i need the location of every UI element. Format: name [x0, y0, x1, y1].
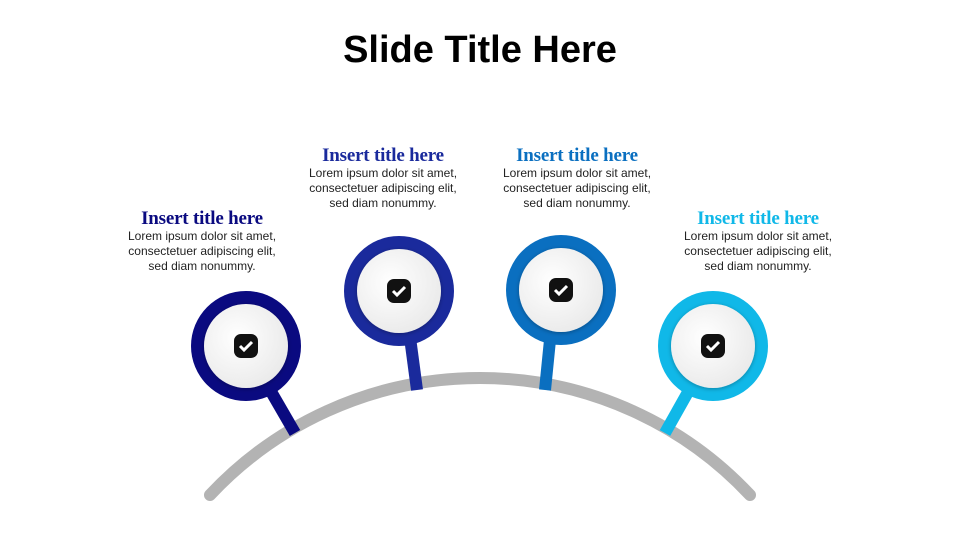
text block 2: consectetuer adipiscing elit,	[309, 181, 457, 195]
text block 3: Insert title here	[516, 145, 638, 166]
text block 4: Lorem ipsum dolor sit amet,	[684, 229, 832, 243]
text block 4	[684, 208, 832, 273]
icon: check	[549, 278, 573, 302]
text block 4: Insert title here	[697, 208, 819, 229]
pin 1	[191, 291, 301, 433]
text block 2: Insert title here	[322, 145, 444, 166]
pin 2	[344, 236, 454, 390]
text block 1: consectetuer adipiscing elit,	[128, 244, 276, 258]
text block 3	[503, 145, 651, 210]
title: Slide Title Here	[343, 29, 617, 71]
pin 3	[506, 235, 616, 390]
arc	[210, 378, 750, 495]
text block 2	[309, 145, 457, 210]
text block 1: Lorem ipsum dolor sit amet,	[128, 229, 276, 243]
text block 3: sed diam nonummy.	[523, 196, 631, 210]
text block 1	[128, 208, 276, 273]
icon: check	[701, 334, 725, 358]
text block 3: Lorem ipsum dolor sit amet,	[503, 166, 651, 180]
text block 2: sed diam nonummy.	[329, 196, 437, 210]
icon: check	[234, 334, 258, 358]
text block 4: sed diam nonummy.	[704, 259, 812, 273]
text block 2: Lorem ipsum dolor sit amet,	[309, 166, 457, 180]
text block 1: Insert title here	[141, 208, 263, 229]
text block 4: consectetuer adipiscing elit,	[684, 244, 832, 258]
pin 4	[658, 291, 768, 433]
icon: check	[387, 279, 411, 303]
text block 1: sed diam nonummy.	[148, 259, 256, 273]
text block 3: consectetuer adipiscing elit,	[503, 181, 651, 195]
